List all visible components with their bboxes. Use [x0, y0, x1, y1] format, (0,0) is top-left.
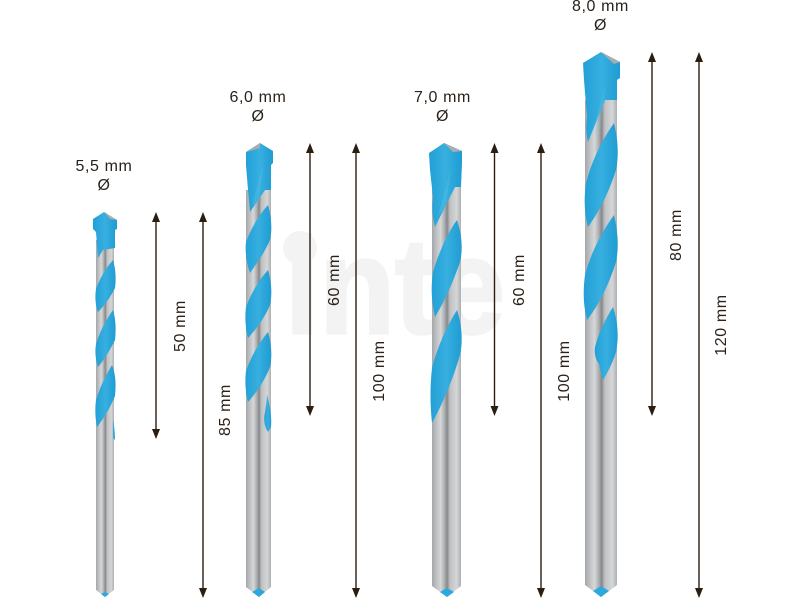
diameter label 7,0 mm: 7,0 mm — [414, 89, 471, 106]
length label 80 mm: 80 mm — [668, 209, 685, 261]
length label 60 mm first: 60 mm — [326, 254, 343, 306]
length label 85 mm: 85 mm — [217, 384, 234, 436]
length label 100 mm first: 100 mm — [371, 340, 388, 402]
arrow: 50 mm — [152, 212, 160, 439]
length label 100 mm second: 100 mm — [556, 340, 573, 402]
diameter label 8,0 mm — [572, 0, 629, 34]
drill bit 6.0 mm — [245, 143, 273, 597]
arrow: 120 mm — [695, 52, 703, 598]
drill bit 8.0 mm — [583, 52, 620, 597]
drill bit 7.0 mm — [429, 143, 462, 597]
length label 120 mm: 120 mm — [713, 294, 730, 356]
diameter label 6,0 mm — [230, 89, 286, 125]
diameter label 7,0 mm — [414, 89, 471, 125]
arrow: 85 mm — [199, 212, 207, 598]
watermark: inte: inte — [285, 210, 505, 362]
diameter label 8,0 mm: Ø — [594, 17, 607, 34]
arrow: 100 mm second — [537, 143, 545, 598]
diameter label 6,0 mm: 6,0 mm — [230, 89, 286, 106]
diameter label 5,5 mm: 5,5 mm — [76, 158, 132, 175]
length label 50 mm: 50 mm — [172, 300, 189, 352]
drill bit 5.5 mm — [93, 212, 117, 597]
arrow: 60 mm second — [490, 143, 498, 416]
diameter label 5,5 mm: Ø — [97, 177, 111, 194]
arrow: 80 mm — [648, 52, 656, 416]
length label 60 mm second: 60 mm — [511, 254, 528, 306]
arrow: 60 mm first — [306, 143, 314, 416]
diameter label 5,5 mm — [76, 158, 132, 194]
arrow: 100 mm first — [352, 143, 360, 598]
diameter label 7,0 mm: Ø — [436, 108, 449, 125]
diameter label 6,0 mm: Ø — [251, 108, 265, 125]
